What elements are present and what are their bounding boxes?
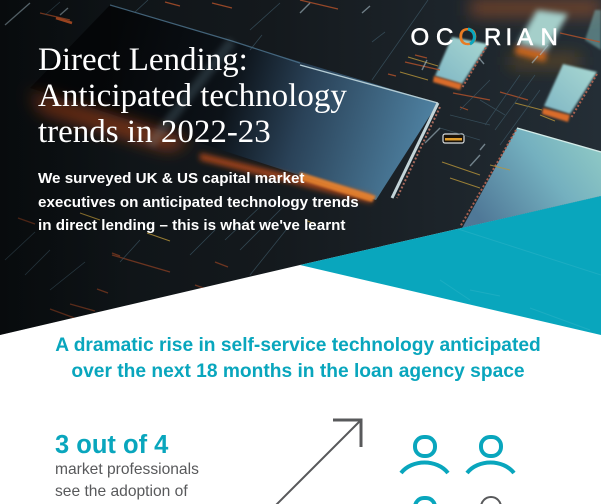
small chip c blurred (515, 10, 568, 62)
photo group (0, 0, 601, 340)
title (38, 42, 347, 150)
intro text: executives on anticipated technology trends (38, 194, 359, 210)
yellow traces (80, 57, 555, 241)
section heading: A dramatic rise in self-service technology anticipated (55, 335, 541, 356)
intro text: in direct lending – this is what we've learnt (38, 217, 345, 234)
statistic description (55, 461, 199, 500)
icon: person 2 (467, 437, 514, 473)
section heading (55, 335, 541, 382)
left vignette (0, 2, 110, 335)
logo: OCO RIAN (410, 24, 558, 51)
chip glow orange edge (200, 153, 372, 203)
statistic: 3 out of 4: 3 out of 4 (55, 431, 168, 459)
teal triangle (300, 196, 601, 335)
icon: person 1 (401, 437, 448, 473)
blurred top right glow (470, 0, 601, 67)
connector (443, 134, 464, 143)
section heading: over the next 18 months in the loan agency space (71, 361, 525, 382)
statistic description: market professionals (55, 461, 199, 478)
orange traces upper (40, 0, 600, 110)
large right chip (460, 128, 601, 232)
title: Anticipated technology (38, 78, 347, 114)
icon: person 4 (481, 497, 501, 504)
icon: person 3 (415, 498, 435, 504)
large chip (30, 5, 438, 200)
intro text: We surveyed UK & US capital market (38, 170, 304, 187)
small chip b (544, 64, 597, 114)
growth arrow (272, 420, 361, 504)
title: trends in 2022-23 (38, 114, 271, 150)
intro text (38, 170, 359, 234)
small chip a (435, 37, 488, 84)
orange traces lower (18, 218, 228, 320)
title: Direct Lending: (38, 42, 248, 78)
statistic description: see the adoption of (55, 482, 188, 500)
light traces (5, 0, 540, 290)
